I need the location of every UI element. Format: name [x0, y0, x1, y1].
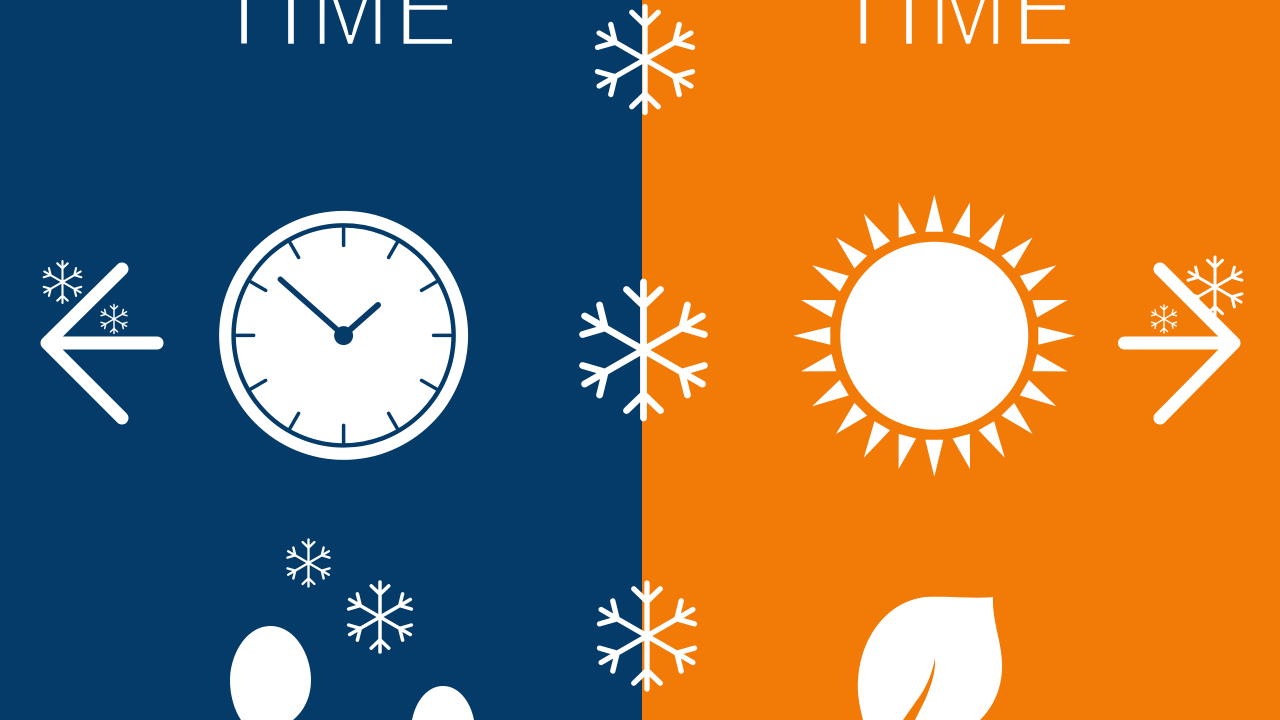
icon: tiny snowflake by left arrow: [100, 304, 128, 334]
icon: snowflake above eggs: [285, 540, 332, 586]
panel: summer side: [642, 0, 1280, 720]
icon: tiny snowflake by right arrow: [1150, 305, 1178, 333]
icon: bottom centre snowflake: [594, 583, 700, 689]
icon: left arrow: [47, 269, 157, 418]
icon: large egg: [230, 626, 311, 720]
icon: small snowflake by left arrow: [42, 261, 83, 303]
icon: snowflake by right arrow: [1185, 257, 1245, 317]
icon: top centre snowflake: [592, 7, 698, 113]
icon: small egg: [412, 686, 474, 720]
icon: middle centre snowflake: [576, 282, 711, 418]
icon: leaf: [858, 597, 1002, 720]
panel: winter side: [0, 0, 642, 720]
icon: clock: [219, 211, 468, 460]
icon: right arrow: [1124, 269, 1234, 418]
icon: sun: [793, 195, 1075, 477]
icon: snowflake right of eggs: [345, 582, 415, 652]
